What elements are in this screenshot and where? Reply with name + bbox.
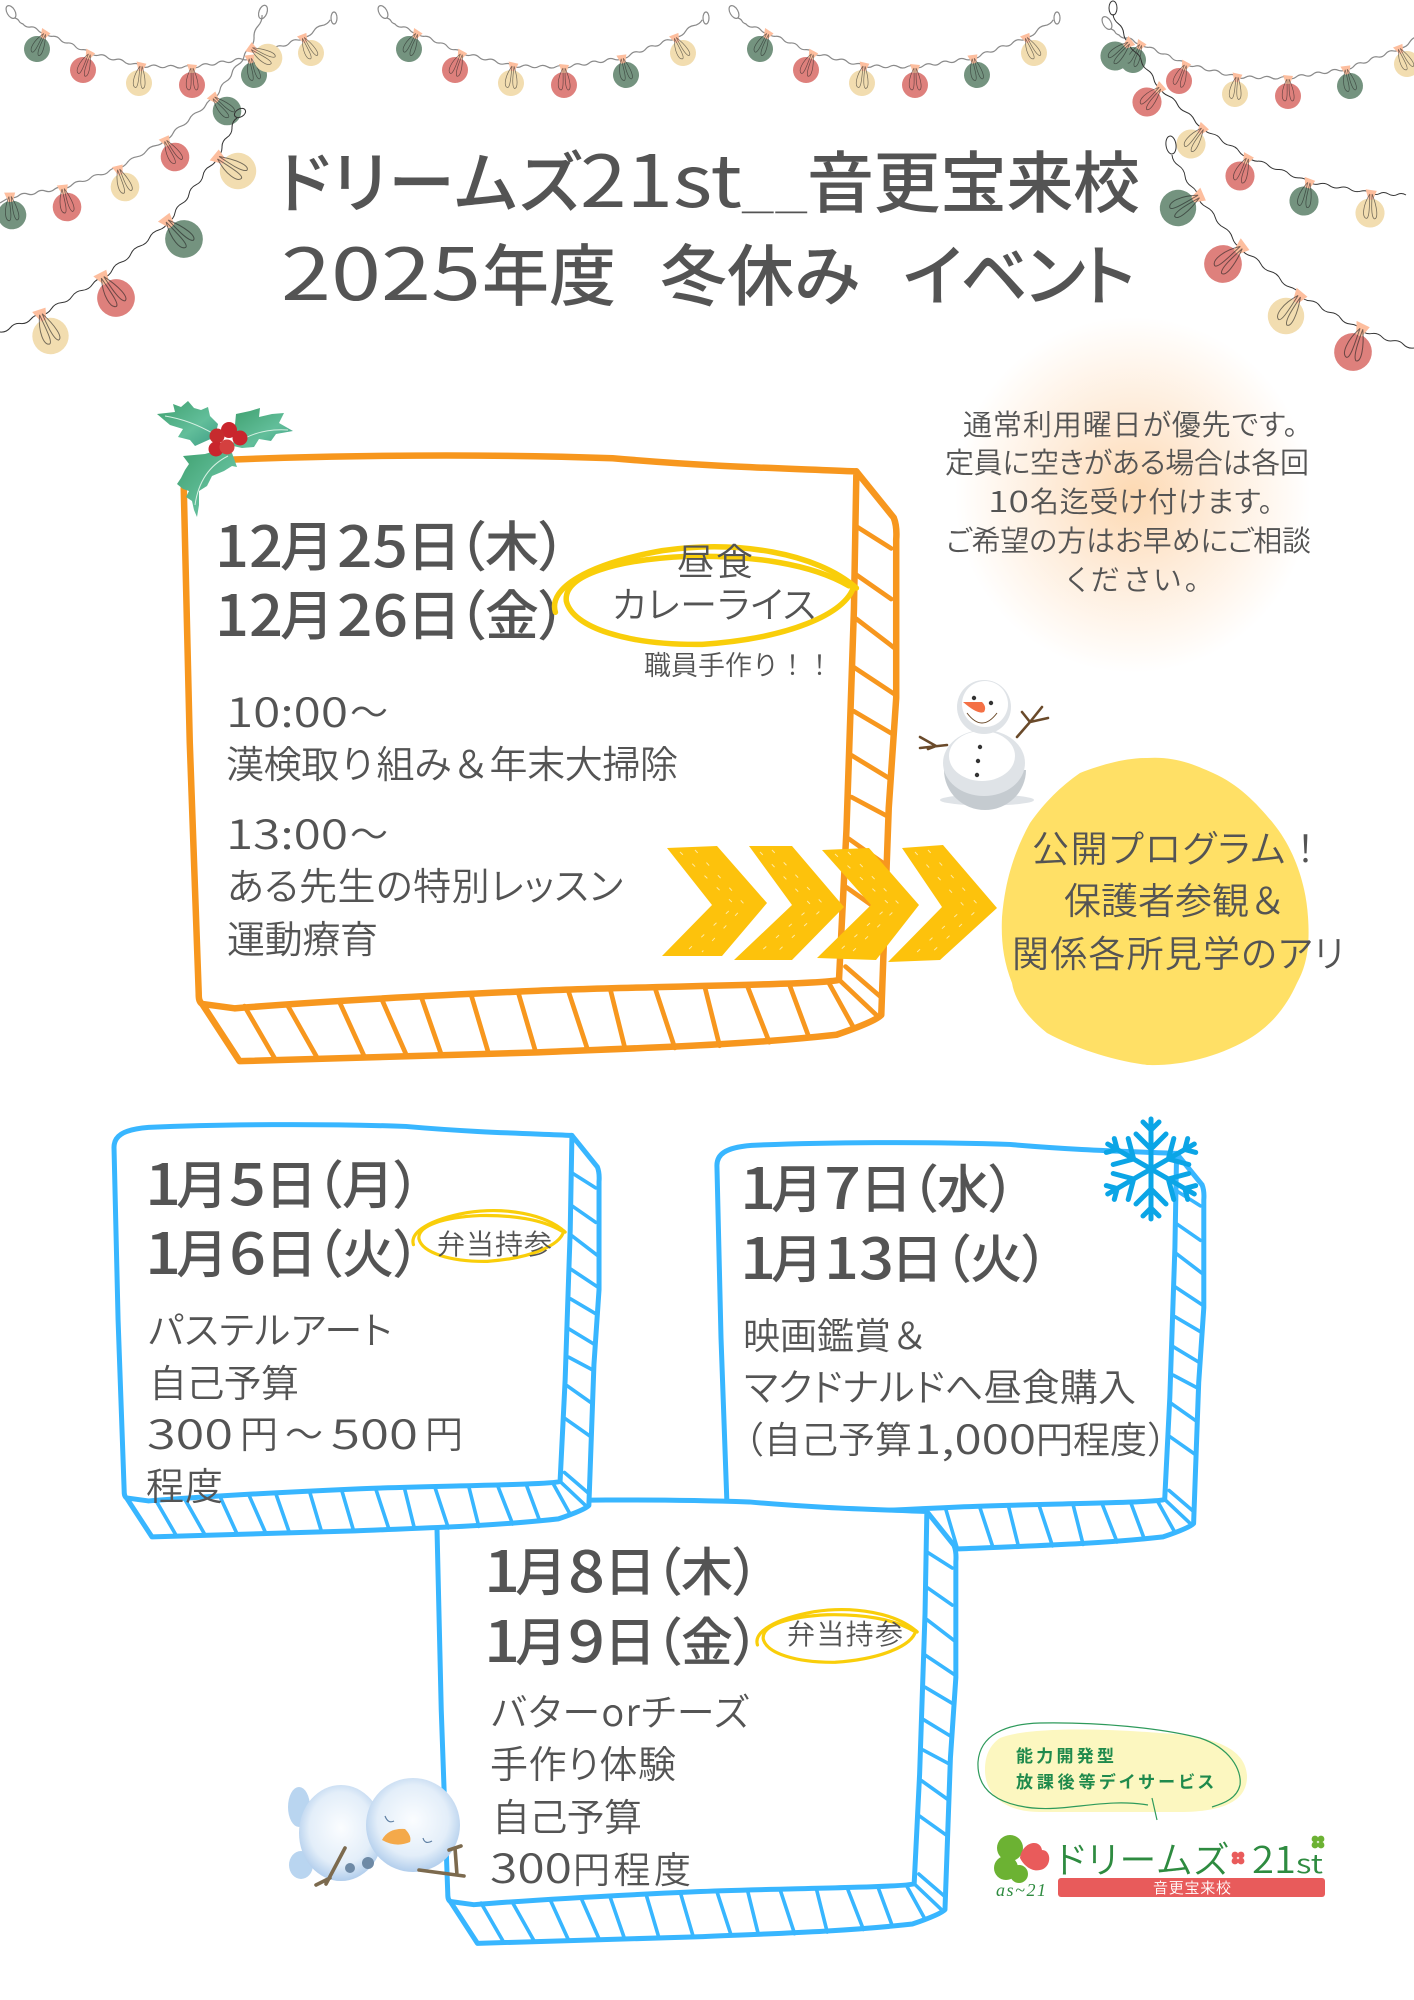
callout: lunch curry rice: カレーライス: [612, 575, 816, 629]
heading: dates: （金）: [458, 572, 566, 651]
garland: right lower diagonal: [1153, 135, 1414, 376]
heading: dates: 1: [740, 1144, 776, 1226]
schedule text: ある先生の特別レッスン: [227, 856, 623, 911]
activity text: 1,000: [914, 1408, 1036, 1466]
heading: dates: 月: [515, 1601, 567, 1676]
activity text: 自己予算: [492, 1787, 642, 1842]
callout: bring bento: [413, 1211, 565, 1263]
heading: dates: 1: [484, 1597, 520, 1679]
logo: Dreams 21st Otofuke Horai school: [978, 1723, 1325, 1900]
heading: dates: 月: [515, 1531, 567, 1606]
activity text: ～: [285, 1404, 323, 1459]
icon: snowflake: [1100, 1119, 1202, 1219]
heading: dates: （月）: [316, 1144, 420, 1219]
activity text: [490, 1682, 750, 1895]
callout: bring bento: [757, 1610, 917, 1662]
activity text: 円程度）: [1036, 1410, 1184, 1464]
heading: dates: 1: [145, 1209, 181, 1291]
schedule text: 運動療育: [227, 909, 378, 964]
title: 冬休み: [660, 223, 861, 320]
panel: 12/25 12/26 event: [184, 456, 896, 1061]
callout: capacity note with peach glow: 定員に空きがある場合は各回: [945, 440, 1309, 482]
panel: 1/7 1/13 event: [717, 1143, 1204, 1555]
clover mark: [994, 1835, 1049, 1900]
garland: top left: [4, 4, 337, 98]
heading: dates: 12: [215, 502, 283, 584]
activity text: 映画鑑賞＆: [743, 1306, 928, 1360]
icon: sleeping snowman: [288, 1778, 464, 1885]
garland: right middle diagonal: [1094, 1, 1406, 228]
garland: left middle diagonal: [0, 4, 288, 231]
heading: dates: 日: [265, 1213, 317, 1288]
schedule text: 10:00: [226, 681, 348, 739]
icon: holly: [157, 401, 293, 517]
activity text: 自己予算: [149, 1353, 299, 1408]
garland: top right: [1100, 15, 1414, 109]
callout: open programme blob: 関係各所見学のアリ: [1012, 924, 1344, 978]
heading: dates: 7: [824, 1144, 861, 1226]
callout: open programme blob: 保護者参観＆: [1064, 871, 1286, 925]
heading: dates: [484, 1527, 759, 1679]
heading: dates: 5: [229, 1140, 266, 1222]
heading: dates: （火）: [944, 1218, 1048, 1293]
callout: capacity note with peach glow: ご希望の方はお早めにご相談: [946, 518, 1311, 560]
activity text: 300: [147, 1403, 233, 1461]
title: 2025: [281, 216, 481, 321]
heading: dates: 月: [771, 1218, 823, 1293]
title: __: [741, 174, 809, 218]
heading: dates: 日: [860, 1148, 912, 1223]
heading: dates: 日: [604, 1531, 656, 1606]
callout: capacity note with peach glow: ください。: [1067, 557, 1199, 599]
heading: dates: 1: [484, 1527, 520, 1609]
speech bubble: 能力開発型: [1016, 1742, 1114, 1767]
activity text: パステルアート: [148, 1300, 392, 1355]
heading: dates: 26: [337, 571, 408, 653]
callout: capacity note with peach glow: 名迄受け付けます。: [1030, 479, 1273, 521]
schedule text: ～: [350, 682, 388, 737]
heading: dates: 月: [771, 1148, 823, 1223]
activity text: マクドナルドへ昼食購入: [744, 1357, 1136, 1412]
heading: dates: 月: [280, 572, 334, 651]
activity text: 円: [425, 1404, 463, 1459]
speech bubble: 放課後等デイサービス: [1016, 1768, 1214, 1793]
title: [277, 123, 1140, 321]
heading: dates: （木）: [458, 503, 566, 582]
activity text: 程度: [146, 1456, 223, 1511]
heading: dates: 1: [740, 1214, 776, 1296]
heading: dates: 9: [568, 1597, 605, 1679]
garland: top centre left: [376, 4, 709, 98]
heading: dates: 日: [265, 1144, 317, 1219]
wordmark: 音更宝来校: [1153, 1877, 1231, 1898]
heading: dates: [215, 502, 566, 653]
callout: open programme blob: 公開プログラム！: [1032, 819, 1324, 873]
activity text: バターorチーズ: [491, 1682, 750, 1737]
heading: dates: 6: [229, 1209, 266, 1291]
schedule text: 漢検取り組み＆年末大掃除: [226, 734, 678, 789]
title: イベント: [903, 223, 1135, 320]
callout: bring bento: 弁当持参: [787, 1613, 903, 1653]
heading: dates: 25: [337, 502, 408, 584]
heading: dates: 日: [891, 1218, 943, 1293]
heading: dates: （水）: [911, 1148, 1015, 1223]
clover mark: as~21: [996, 1880, 1046, 1900]
icon: snowman: [920, 680, 1048, 810]
schedule text: [226, 681, 678, 964]
activity text: 円程度: [573, 1840, 691, 1894]
title: 音更宝来校: [807, 130, 1140, 227]
wordmark: 21: [1252, 1830, 1296, 1884]
garland: top centre right: [727, 4, 1060, 98]
heading: dates: 8: [568, 1527, 605, 1609]
wordmark: st: [1296, 1844, 1323, 1881]
activity text: 手作り体験: [490, 1734, 676, 1789]
schedule text: ～: [350, 804, 388, 859]
heading: dates: [145, 1140, 420, 1291]
callout: capacity note with peach glow: 通常利用曜日が優先です。: [963, 402, 1298, 444]
heading: dates: 日: [407, 572, 461, 651]
callout: open programme blob: [1002, 758, 1344, 1065]
title: ドリームズ: [277, 130, 582, 227]
activity text: 500: [331, 1403, 418, 1461]
wordmark: [1056, 1830, 1325, 1898]
garland: left lower diagonal: [0, 107, 263, 360]
heading: dates: 日: [604, 1601, 656, 1676]
heading: dates: 月: [176, 1213, 228, 1288]
heading: dates: 12: [215, 571, 283, 653]
activity text: [727, 1306, 1184, 1466]
schedule text: 13:00: [226, 803, 348, 861]
callout: lunch curry rice: [555, 532, 856, 683]
heading: dates: 1: [145, 1140, 181, 1222]
heading: dates: （金）: [655, 1601, 759, 1676]
title: 年度: [482, 223, 616, 320]
activity text: 円: [240, 1404, 278, 1459]
heading: dates: 月: [280, 503, 334, 582]
arrows: yellow chevrons: [662, 845, 997, 962]
callout: bring bento: 弁当持参: [437, 1223, 552, 1263]
activity text: [146, 1300, 463, 1511]
heading: dates: 13: [824, 1214, 894, 1296]
heading: dates: （火）: [316, 1213, 420, 1288]
callout: capacity note with peach glow: 10: [988, 479, 1029, 521]
heading: dates: [740, 1144, 1048, 1296]
panel: 1/5 1/6 event: [114, 1125, 599, 1537]
callout: lunch curry rice: 昼食: [677, 532, 753, 586]
title: 21st: [580, 123, 742, 228]
speech bubble: [978, 1723, 1247, 1820]
activity text: （自己予算: [727, 1410, 912, 1464]
heading: dates: 日: [407, 503, 461, 582]
callout: capacity note with peach glow: [945, 317, 1311, 673]
heading: dates: 月: [176, 1144, 228, 1219]
wordmark: ドリームズ: [1056, 1830, 1229, 1884]
callout: lunch curry rice: 職員手作り！！: [644, 644, 833, 683]
heading: dates: （木）: [655, 1531, 759, 1606]
activity text: 300: [490, 1837, 572, 1895]
panel: 1/8 1/9 event: [437, 1500, 956, 1943]
